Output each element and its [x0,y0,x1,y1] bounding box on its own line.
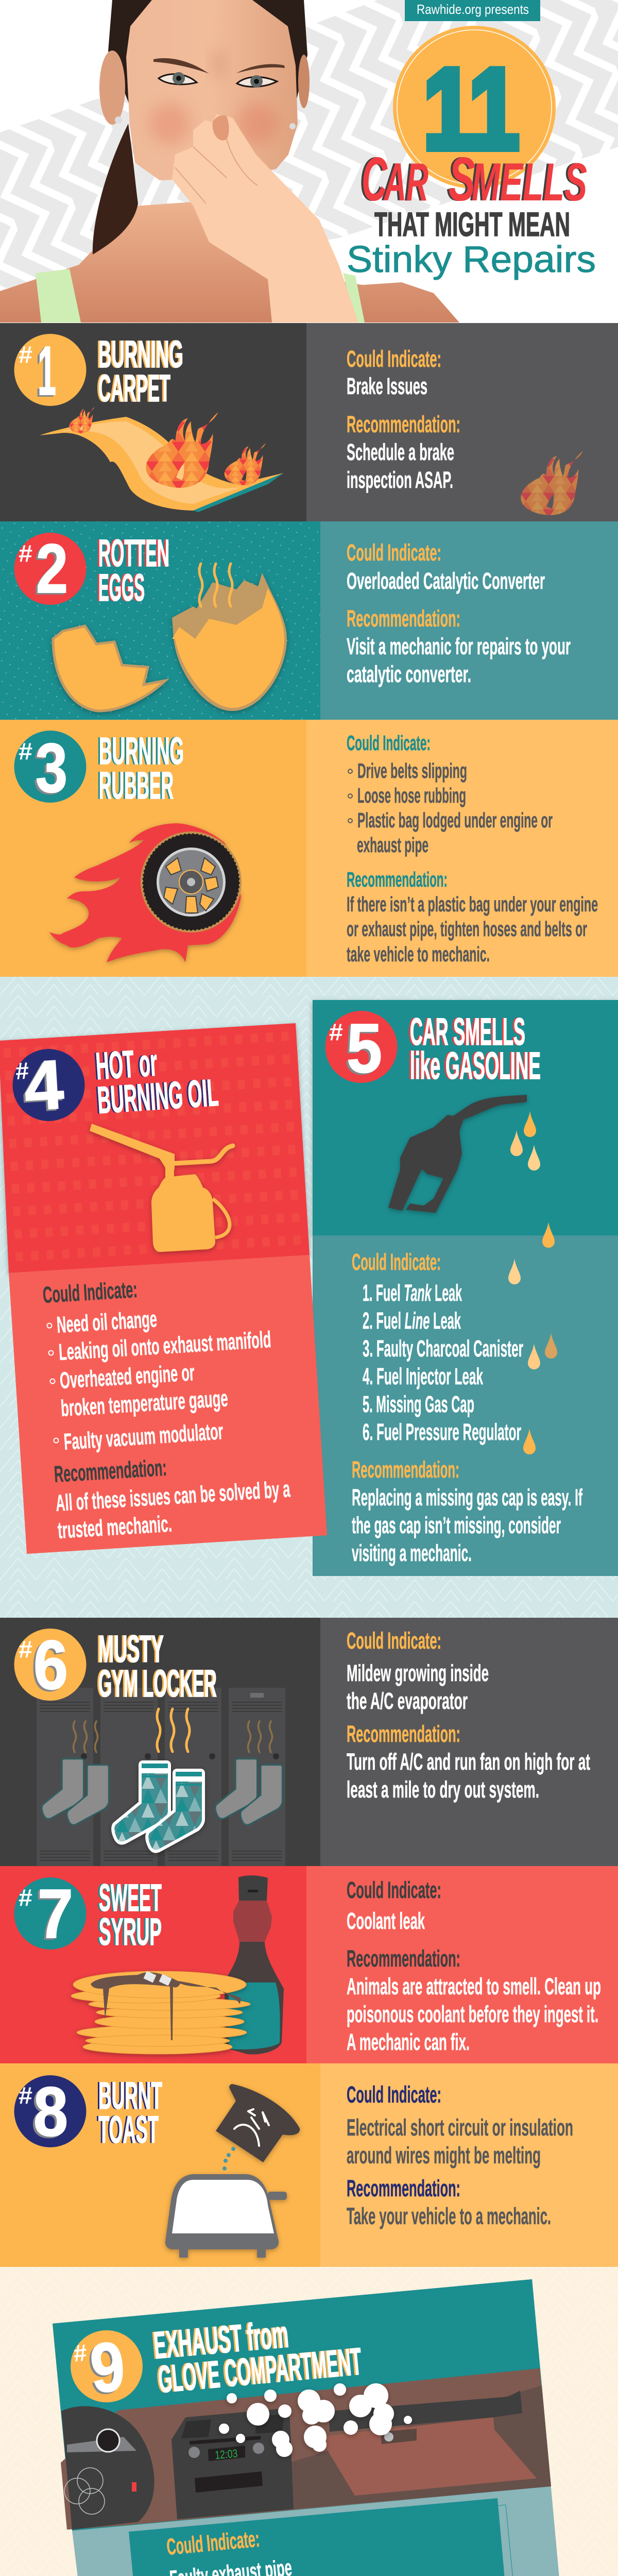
section 6: musty gym locker [0,1618,618,1866]
title: Car Smells: S [449,145,475,214]
heading: HOT or [95,1041,159,1088]
badge 2: 2 [36,530,68,607]
badge 4: # [15,1057,30,1084]
section 1: burning carpet: BURNING [98,333,183,376]
badge 6: # [19,1636,32,1663]
badge 4: 4 [22,1045,66,1125]
badge 7: # [19,1884,32,1911]
text: could indicate: Could Indicate: [347,2081,441,2108]
badge 6: 6 [33,1626,68,1704]
heading: EXHAUST from [152,2312,290,2367]
icon: gas nozzle [388,1095,527,1213]
text: recommendation: catalytic converter. [347,661,471,687]
photo: woman holding her nose [0,0,459,323]
section 7: sweet syrup: SWEET [99,1876,162,1919]
illustration: pancake stack [71,1971,250,2054]
badge 8: 8 [33,2073,68,2150]
text: recommendation: inspection ASAP. [347,467,453,493]
badge 5: # [329,1019,343,1045]
text: recommendation: Recommendation: [352,1456,459,1483]
section 1: burning carpet [0,323,618,521]
text: recommendation: Recommendation: [347,1945,460,1972]
section 3: burning rubber [0,720,618,977]
badge 3 [14,729,87,807]
illustration: burnt toast [216,2084,300,2162]
text: could indicate: Could Indicate: [347,539,441,566]
section 5: gasoline card [313,1000,618,1576]
text: could indicate: Mildew growing inside [347,1660,489,1686]
icon: stink lines [199,564,232,606]
section 4: hot or burning oil card: BURNING OIL [96,1071,220,1122]
heading: RUBBER [99,764,174,807]
panel: patterned background for sections 4 and 5 [0,977,618,1618]
illustration: lockers [37,1688,285,1866]
hand [172,114,358,323]
heading [152,2312,364,2401]
illustration: burning carpet [40,407,284,512]
text: recommendation [53,1454,291,1544]
smoke clouds [219,2383,412,2457]
section 8: burnt toast: BURNT [98,2074,162,2117]
heading: MUSTY [98,1628,164,1670]
text card [129,2498,524,2576]
text: recommendation [347,411,460,493]
badge 1 [14,332,87,410]
text: recommendation: Recommendation: [347,2175,460,2201]
section 7: sweet syrup [0,1866,618,2063]
text: recommendation: Schedule a brake [347,439,454,465]
title: stinky repairs: Stinky Repairs [347,239,596,280]
text: recommendation [347,2175,551,2229]
heading [95,1041,220,1122]
text: could indicate [347,1628,489,1714]
text: could indicate: Overheated engine or [59,1359,195,1394]
illustration: dashboard [61,2368,551,2530]
badge 9: 9 [87,2327,128,2408]
header panel [0,0,618,323]
badge 3: # [19,738,32,765]
section 9: exhaust from glove compartment [0,2267,618,2576]
text: could indicate: Could Indicate: [347,346,441,372]
badge 1: # [19,341,32,368]
text: recommendation: Recommendation: [53,1454,167,1487]
text: could indicate: Leaking oil onto exhaust manifold [58,1326,272,1365]
icon: crumbs [222,2147,235,2171]
text: recommendation: All of these issues can be solved by a [55,1476,291,1516]
text: could indicate: broken temperature gauge [60,1385,229,1421]
text: could indicate: Could Indicate: [347,1877,441,1903]
text: could indicate [347,731,553,857]
badge 7: 7 [38,1875,73,1953]
text: recommendation [347,1721,590,1803]
badge 4 [12,1045,84,1125]
badge 7 [14,1875,87,1953]
text: could indicate: 4. Fuel Injector Leak [363,1363,484,1389]
text: recommendation: A mechanic can fix. [347,2029,470,2055]
text: could indicate: Drive belts slipping [357,759,467,783]
badge 9 [71,2327,143,2408]
text: could indicate [165,2526,293,2576]
text: could indicate: Could Indicate: [165,2526,261,2560]
title badge: 11 [393,26,556,189]
text: could indicate: Brake Issues [347,373,427,399]
illustration: toaster [165,2174,287,2258]
icon: stink lines [73,1709,272,1752]
badge 5 [325,1009,398,1087]
text: recommendation: visiting a mechanic. [352,1540,472,1566]
title badge: 11: 11 [423,45,519,173]
title: Car Smells: AR [383,152,428,212]
illustration: syrup bottle [225,1875,284,2055]
text: could indicate: Could Indicate: [352,1249,441,1275]
illustration: smelly socks [113,1762,203,1852]
icon: oil can [90,1124,233,1252]
heading [98,333,183,410]
card [53,2279,570,2576]
illustration: faded socks, left pair [42,1759,109,1825]
text: could indicate: 1. Fuel Tank Leak [363,1280,462,1306]
tank top straps [36,269,81,323]
section 8: burnt toast [0,2063,618,2267]
heading [99,730,184,807]
text: could indicate: 2. Fuel Line Leak [363,1308,461,1334]
text: could indicate [347,2081,573,2168]
text: recommendation: Recommendation: [347,1721,460,1747]
badge 8: # [19,2082,32,2109]
text: could indicate: Loose hose rubbing [357,784,466,807]
section 2: rotten eggs: ROTTEN [98,532,169,574]
illustration: cracked egg [53,573,287,711]
section 8: burnt toast: TOAST [98,2108,159,2151]
text: could indicate: 5. Missing Gas Cap [363,1391,474,1417]
text: could indicate: Could Indicate: [347,1628,441,1654]
text: recommendation: take vehicle to mechanic. [347,942,490,966]
heading [98,532,169,609]
heading [410,1010,541,1087]
text: recommendation [347,605,571,687]
text: recommendation [347,868,598,966]
icon: faded flame [521,451,583,515]
badge 1: 1 [38,332,56,410]
title: Car Smells: C [362,145,388,214]
card: GLOVE COMPARTMENT [157,2340,364,2401]
heading [98,2074,162,2151]
text: could indicate [347,539,545,594]
text: could indicate: exhaust pipe [357,833,428,857]
icon: syrup and butter [91,1971,241,2040]
section 7: sweet syrup: SYRUP [99,1910,162,1953]
heading [98,1628,217,1705]
heading [99,1876,162,1953]
badge 2 [14,530,87,607]
badge 5: 5 [347,1009,382,1087]
text: recommendation: Recommendation: [347,868,448,891]
text: could indicate [352,1249,523,1445]
badge 2: # [19,540,32,567]
section 6: musty gym locker: GYM LOCKER [98,1662,217,1705]
text: could indicate: Coolant leak [347,1908,425,1934]
steering wheel [61,2406,154,2530]
badge 6 [14,1626,87,1704]
badge 8 [14,2073,87,2150]
heading: CARPET [98,367,170,410]
text: recommendation [352,1456,583,1566]
text: could indicate: Could Indicate: [42,1276,138,1308]
illustration: tire on fire [49,823,242,962]
text: could indicate: Need oil change [56,1306,158,1338]
eyes [159,72,277,88]
eyebrows [153,58,285,74]
badge 9: # [72,2339,88,2367]
section 2: rotten eggs [0,521,618,720]
text: could indicate [347,1877,441,1934]
text: recommendation: Recommendation: [347,605,460,632]
section 3: burning rubber: BURNING [99,730,184,772]
text: could indicate: Faulty vacuum modulator [63,1418,224,1455]
text: could indicate: Could Indicate: [347,731,431,755]
title: Car Smells [362,145,587,214]
text: could indicate [347,346,441,399]
presents banner: Rawhide.org presents [417,2,529,17]
section 4: hot or burning oil card [0,1023,327,1554]
text: could indicate: the A/C evaporator [347,1688,468,1714]
badge 3: 3 [36,729,67,807]
heading: EGGS [98,566,145,609]
presents banner [405,0,540,21]
text: recommendation: trusted mechanic. [57,1511,173,1544]
illustration: faded socks, right pair [215,1759,282,1825]
icon: fuel drops [508,1111,557,1454]
text: recommendation [347,1945,601,2055]
text: recommendation: Recommendation: [347,411,460,437]
text: could indicate [42,1276,272,1455]
clock display: 12:03 [214,2447,238,2462]
